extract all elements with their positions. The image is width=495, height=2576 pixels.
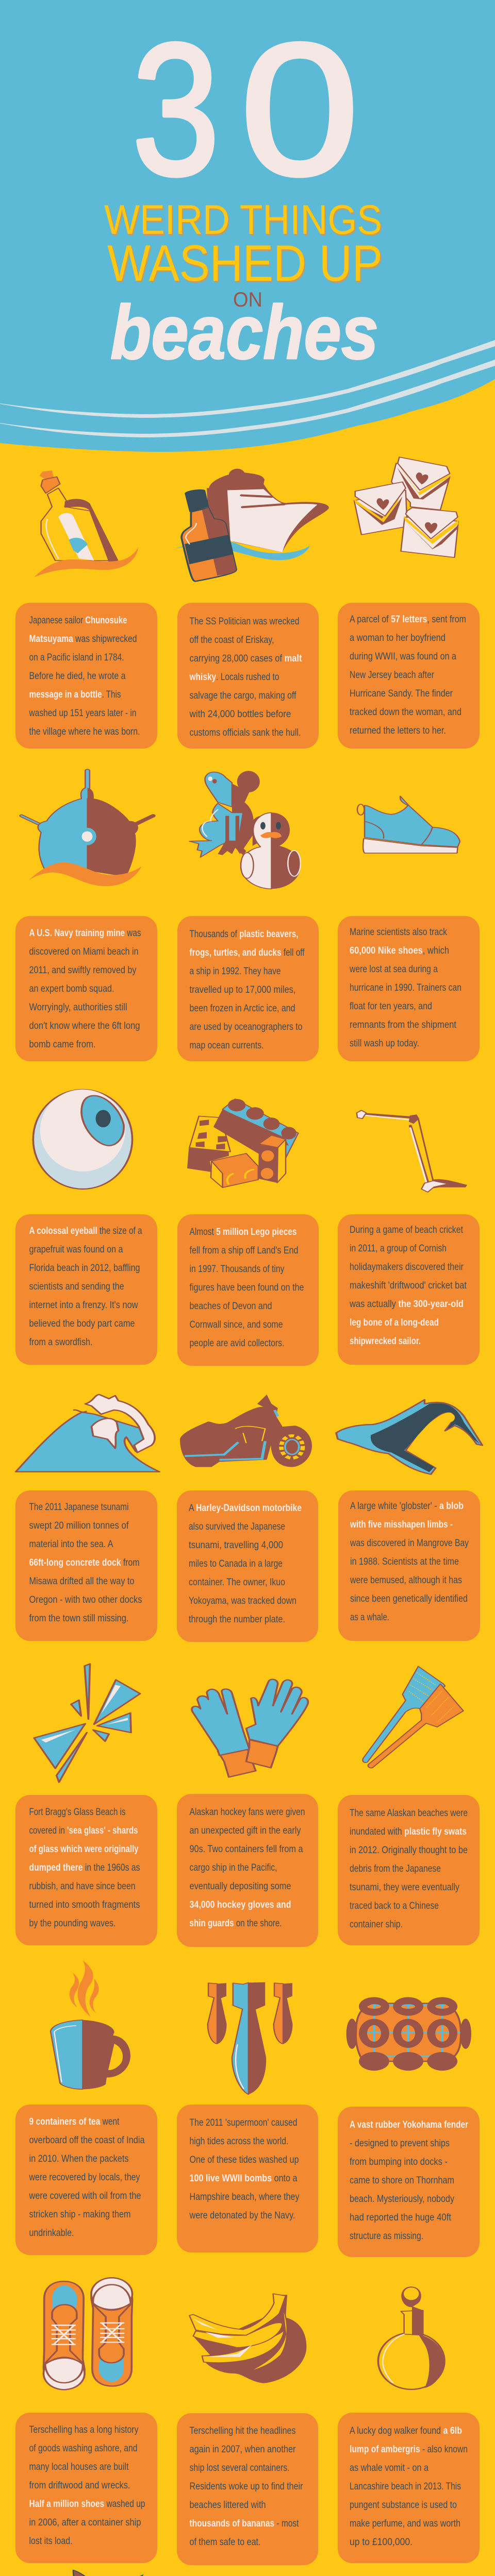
icon: bombs [208,1982,293,2094]
icon: three envelopes [354,457,458,557]
title line: washed up: WASHED UP [108,236,384,293]
card: navy mine: A U.S. Navy training mine was [29,927,141,939]
card: harley: Yokoyama, was tracked down [189,1595,296,1606]
card: bombs: 100 live WWII bombs onto a [190,2173,298,2184]
card: lego: Almost 5 million Lego pieces [190,1226,297,1238]
card: Terschelling shoes: lost its load. [29,2535,72,2547]
item 1: message in a bottle [15,470,157,749]
card: fender [338,2107,480,2257]
card: tsunami: 66ft-long concrete dock from [29,1557,139,1568]
item 19: half a million shoes [15,2278,157,2563]
right shoe [91,2278,133,2386]
card: eyeball: believed the body part came [29,1318,135,1329]
title word: on: ON [233,289,262,311]
card: bombs: high tides across the world. [190,2136,289,2147]
card: tsunami: Oregon - with two other docks [29,1594,142,1605]
card: fly swats: container ship. [350,1919,403,1930]
card: ambergris: make perfume, and was worth [350,2518,460,2529]
card: fly swats: tsunami, they were eventually [350,1882,459,1893]
item 22: bags of cocaine [15,2570,157,2576]
card: eyeball: grapefruit was found on a [29,1244,123,1255]
card: ambergris: lump of ambergris - also known [350,2444,468,2455]
card: ambergris [338,2413,480,2563]
item 13: sea glass [15,1664,157,1945]
panel: top sea [0,0,495,452]
card: bananas [177,2413,318,2565]
card: Terschelling shoes: Terschelling has a long history [29,2424,139,2435]
card: navy mine: Worryingly, authorities still [29,1002,127,1013]
card: fly swats: debris from the Japanese [350,1863,441,1874]
card: tsunami [15,1490,157,1641]
card: Terschelling shoes [15,2413,157,2563]
item 16: containers of tea [15,1960,157,2255]
card: cricket bat: was actually the 300-year-old [349,1298,464,1310]
card: parcel of letters: tracked down the woman, and [350,706,461,718]
card: sea glass: turned into smooth fragments [29,1899,140,1910]
card: cricket bat [338,1214,480,1365]
card: globster [338,1490,480,1641]
card: parcel of letters [338,603,480,749]
card: nike shoes: remnants from the shipment [350,1019,456,1030]
item 7: colossal eyeball [15,1090,157,1365]
card: sailor message: Japanese sailor Chunosuke [29,615,127,626]
card: tea: stricken ship - making them [29,2209,131,2220]
item 11: harley davidson [177,1395,318,1642]
card: sailor message: the village where he was born. [29,726,140,737]
card: bombs: were detonated by the Navy. [189,2210,295,2221]
card: SS Politician: off the coast of Eriskay, [190,634,274,646]
card: fender: came to shore on Thornham [350,2175,454,2186]
card: harley: container. The owner, Ikuo [189,1577,285,1588]
card: globster: as a whale. [350,1612,389,1623]
card: navy mine: discovered on Miami beach in [29,946,138,957]
card: harley: tsunami, travelling 4,000 [189,1539,283,1551]
card: hockey gloves: 34,000 hockey gloves and [190,1899,291,1910]
card: ambergris: Lancashire beach in 2013. This [350,2481,461,2492]
card: sailor message: on a Pacific island in 1784. [29,652,124,663]
item 21: ambergris perfume [338,2286,480,2563]
card: tsunami: from the town still missing. [29,1613,129,1624]
card: bombs: Hampshire beach, where they [190,2191,300,2202]
card: parcel of letters: New Jersey beach after [350,669,434,681]
item 6: nike shoes [338,796,480,1061]
card: ambergris: as whale vomit - on a [350,2462,428,2473]
card: tea: were recovered by locals, they [29,2172,140,2183]
icon: fly swats [362,1666,464,1768]
card: globster: A large white 'globster' - a blob [350,1500,464,1512]
card: parcel of letters: during WWII, was found on a [350,651,456,662]
card: globster: in 1988. Scientists at the time [350,1556,459,1567]
card: Terschelling shoes: Half a million shoes washed up [29,2498,145,2510]
card: tsunami: swept 20 million tonnes of [29,1520,129,1531]
card: nike shoes: still wash up today. [350,1038,419,1049]
card: cricket bat: shipwrecked sailor. [350,1335,421,1347]
card: hockey gloves: an unexpected gift in the early [190,1825,301,1836]
card: plastic toys: map ocean currents. [190,1040,264,1051]
card: Terschelling shoes: of goods washing ashore, and [29,2443,137,2454]
item 2: whisky ship [175,469,329,749]
card: sailor message: Matsuyama was shipwrecked [29,633,137,645]
card: fly swats: The same Alaskan beaches were [350,1807,468,1819]
card: fly swats: inundated with plastic fly swats [350,1826,467,1837]
icon: leg skeleton [357,1110,467,1192]
icon: lego bricks [187,1099,299,1188]
left shoe [43,2281,85,2389]
card: eyeball: internet into a frenzy. It's now [29,1299,138,1311]
icon: glass shards [34,1664,140,1782]
card: hockey gloves: eventually depositing some [190,1880,291,1892]
card: bananas: of them safe to eat. [190,2536,261,2548]
card: cricket bat: leg bone of a long-dead [350,1317,439,1328]
card: fender: beach. Mysteriously, nobody [350,2193,454,2205]
card: cricket bat: in 2011, a group of Cornish [350,1243,447,1254]
title line: washed up: WASHED UP [107,234,383,292]
card: sea glass: Fort Bragg's Glass Beach is [29,1806,126,1818]
card: sea glass: of glass which were originally [29,1843,139,1855]
item 3: love letters [338,457,480,749]
card: tea [15,2105,157,2255]
card: SS Politician: The SS Politician was wrecked [190,616,299,627]
card: navy mine: bomb came from. [29,1039,96,1050]
icon: motorbike [180,1395,312,1467]
card: plastic toys: a ship in 1992. They have [190,965,280,977]
card: SS Politician: carrying 28,000 cases of malt [190,653,302,664]
card: ambergris: pungent substance is used to [350,2499,457,2511]
card: bananas: again in 2007, when another [190,2444,296,2455]
card: tea: were covered with oil from the [29,2190,141,2201]
card: navy mine: an expert bomb squad. [29,983,114,994]
card: hockey gloves: Alaskan hockey fans were given [190,1806,305,1818]
title number 30: 0 [240,5,359,214]
item 12: globster whale [336,1400,482,1641]
card: harley [177,1490,318,1642]
card: tsunami: material into the sea. A [29,1538,113,1550]
card: SS Politician: salvage the cargo, making off [190,690,296,701]
card: hockey gloves [177,1794,318,1947]
card: fly swats [338,1795,480,1945]
card: tsunami: Misawa drifted all the way to [29,1575,135,1587]
item 14: hockey gloves [177,1680,318,1947]
title word: beaches: beaches [110,290,378,375]
card: eyeball: A colossal eyeball the size of a [29,1225,142,1236]
card: fly swats: in 2012. Originally thought to be [350,1844,468,1856]
card: parcel of letters: returned the letters to her. [350,725,446,736]
card: parcel of letters: Hurricane Sandy. The finder [350,688,453,699]
card: ambergris: up to £100,000. [350,2536,412,2548]
card: lego: people are avid collectors. [190,1337,285,1349]
card: harley: also survived the Japanese [189,1521,285,1532]
card: bananas: beaches littered with [190,2499,266,2511]
icon: hockey gloves [192,1680,308,1777]
card: bananas: ship lost several containers. [190,2462,290,2473]
card: nike shoes: 60,000 Nike shoes, which [350,945,449,956]
card: lego [177,1214,319,1366]
card: bombs: The 2011 'supermoon' caused [190,2117,297,2128]
item 20: bananas [177,2294,318,2565]
card: Terschelling shoes: from driftwood and wrecks. [29,2480,130,2491]
card: plastic toys: been frozen in Arctic ice, and [190,1003,295,1014]
card: fly swats: traced back to a Chinese [350,1900,439,1911]
card: globster: was discovered in Mangrove Bay [350,1537,469,1549]
card: hockey gloves: shin guards on the shore. [190,1918,282,1929]
card: plastic toys: Thousands of plastic beavers, [190,928,298,940]
card: Terschelling shoes: many local houses are built [29,2461,129,2472]
card: harley: A Harley-Davidson motorbike [189,1502,302,1514]
card: SS Politician: whisky. Locals rushed to [189,671,279,683]
card: eyeball: from a swordfish. [29,1336,93,1348]
card: bananas: Terschelling hit the headlines [190,2425,296,2436]
card: sailor message: Before he died, he wrote a [29,670,126,682]
card: hockey gloves: 90s. Two containers fell from a [190,1843,303,1855]
card: plastic toys: travelled up to 17,000 miles, [190,984,296,995]
card: bananas: Residents woke up to find their [190,2481,303,2492]
card: bombs [177,2105,318,2252]
title [104,5,384,375]
card: sailor message: washed up 151 years later - in [29,707,136,719]
card: sea glass [15,1795,157,1945]
title line: weird things: WEIRD THINGS [105,198,383,245]
card: navy mine: don't know where the 6ft long [29,1020,140,1031]
card: lego: beaches of Devon and [190,1300,272,1312]
icon: trainer [357,796,460,853]
card: bombs: One of these tides washed up [190,2154,299,2165]
item 5: plastic bath toys [177,771,319,1061]
icon: sea mine [22,769,153,886]
card: cricket bat: During a game of beach cricket [350,1224,463,1235]
card: tea: 9 containers of tea went [29,2116,120,2127]
card: nike shoes: were lost at sea during a [349,963,438,975]
card: fender: from bumping into docks - [350,2156,448,2167]
card: hockey gloves: cargo ship in the Pacific, [190,1862,277,1873]
card: tea: in 2010. When the packets [29,2153,129,2164]
icon: pair of shoes [43,2278,133,2389]
card: eyeball: Florida beach in 2012, baffling [29,1262,140,1274]
card: globster: since been genetically identified [350,1593,468,1604]
card: navy mine: 2011, and swiftly removed by [29,964,137,976]
card: Terschelling shoes: in 2006, after a container ship [29,2517,141,2528]
icon: plastic frog and duck [189,771,301,889]
card: nike shoes: hurricane in 1990. Trainers can [350,982,461,993]
title number 30 [132,5,359,214]
card: harley: miles to Canada in a large [189,1558,283,1569]
card: globster: were bemused, although it has [350,1574,462,1586]
item 9: leg bone [338,1110,480,1365]
card: SS Politician [177,603,319,749]
card: parcel of letters: A parcel of 57 letters, sent from [350,614,466,625]
card: lego: figures have been found on the [190,1282,304,1293]
card: tea: undrinkable. [29,2227,74,2239]
icon: perfume flask [378,2286,444,2389]
item 17: WWII bombs [177,1982,318,2252]
card: sailor message [15,603,157,749]
item 8: lego pieces [177,1099,319,1366]
card: tsunami: The 2011 Japanese tsunami [29,1501,129,1513]
card: lego: Cornwall since, and some [190,1319,283,1330]
title line: weird things: WEIRD THINGS [104,197,382,243]
card: sea glass: dumped there in the 1960s as [29,1862,140,1873]
card: fender: structure as missing. [350,2230,423,2242]
item 4: navy training mine [15,769,157,1061]
title number 30: 3 [132,5,220,214]
card: eyeball [15,1214,157,1365]
item 10: tsunami dock [15,1395,159,1641]
card: fender: - designed to prevent ships [350,2138,450,2149]
item 18: yokohama fender [338,1997,480,2257]
card: SS Politician: with 24,000 bottles before [189,708,291,720]
card: ambergris: A lucky dog walker found a 6lb [350,2425,462,2436]
card: tea: overboard off the coast of India [29,2134,145,2146]
icon: steaming mug [51,1960,130,2089]
icon: tied bags [38,2570,147,2576]
card: plastic toys [177,916,319,1061]
card: parcel of letters: a woman to her boyfriend [350,632,446,643]
item 15: fly swats [338,1666,480,1945]
icon: whale [336,1400,482,1475]
card: SS Politician: customs officials sank the hull. [190,727,301,738]
card: bananas: thousands of bananas - most [190,2518,299,2529]
card: plastic toys: are used by oceanographers to [190,1021,303,1032]
card: plastic toys: frogs, turtles, and ducks fell off [190,947,305,958]
card: sailor message: message in a bottle. This [29,689,121,700]
icon: rubber fender [346,1997,471,2071]
card: sea glass: by the pounding waves. [29,1918,116,1929]
card: sea glass: rubbish, and have since been [29,1880,135,1892]
icon: tsunami wave [16,1395,159,1472]
card: lego: in 1997. Thousands of tiny [190,1263,285,1275]
card: lego: fell from a ship off Land's End [190,1245,298,1256]
card: navy mine [15,916,157,1061]
card: nike shoes: Marine scientists also track [350,926,447,938]
card: eyeball: scientists and sending the [29,1281,124,1292]
card: globster: with five misshapen limbs - [350,1519,453,1530]
card: cricket bat: makeshift 'driftwood' cricket bat [350,1280,467,1291]
icon: ship and whisky bottle [175,469,329,581]
icon: bunch of bananas [189,2294,306,2383]
card: fender: had reported the huge 40ft [350,2212,451,2223]
card: harley: through the number plate. [189,1614,285,1625]
card: cricket bat: holidaymakers discovered their [350,1261,464,1273]
card: sea glass: covered in 'sea glass' - shards [29,1825,138,1836]
card: nike shoes [338,916,480,1061]
icon: eyeball [33,1090,133,1189]
card: nike shoes: float for ten years, and [350,1001,432,1012]
icon: message in a bottle [34,470,138,577]
